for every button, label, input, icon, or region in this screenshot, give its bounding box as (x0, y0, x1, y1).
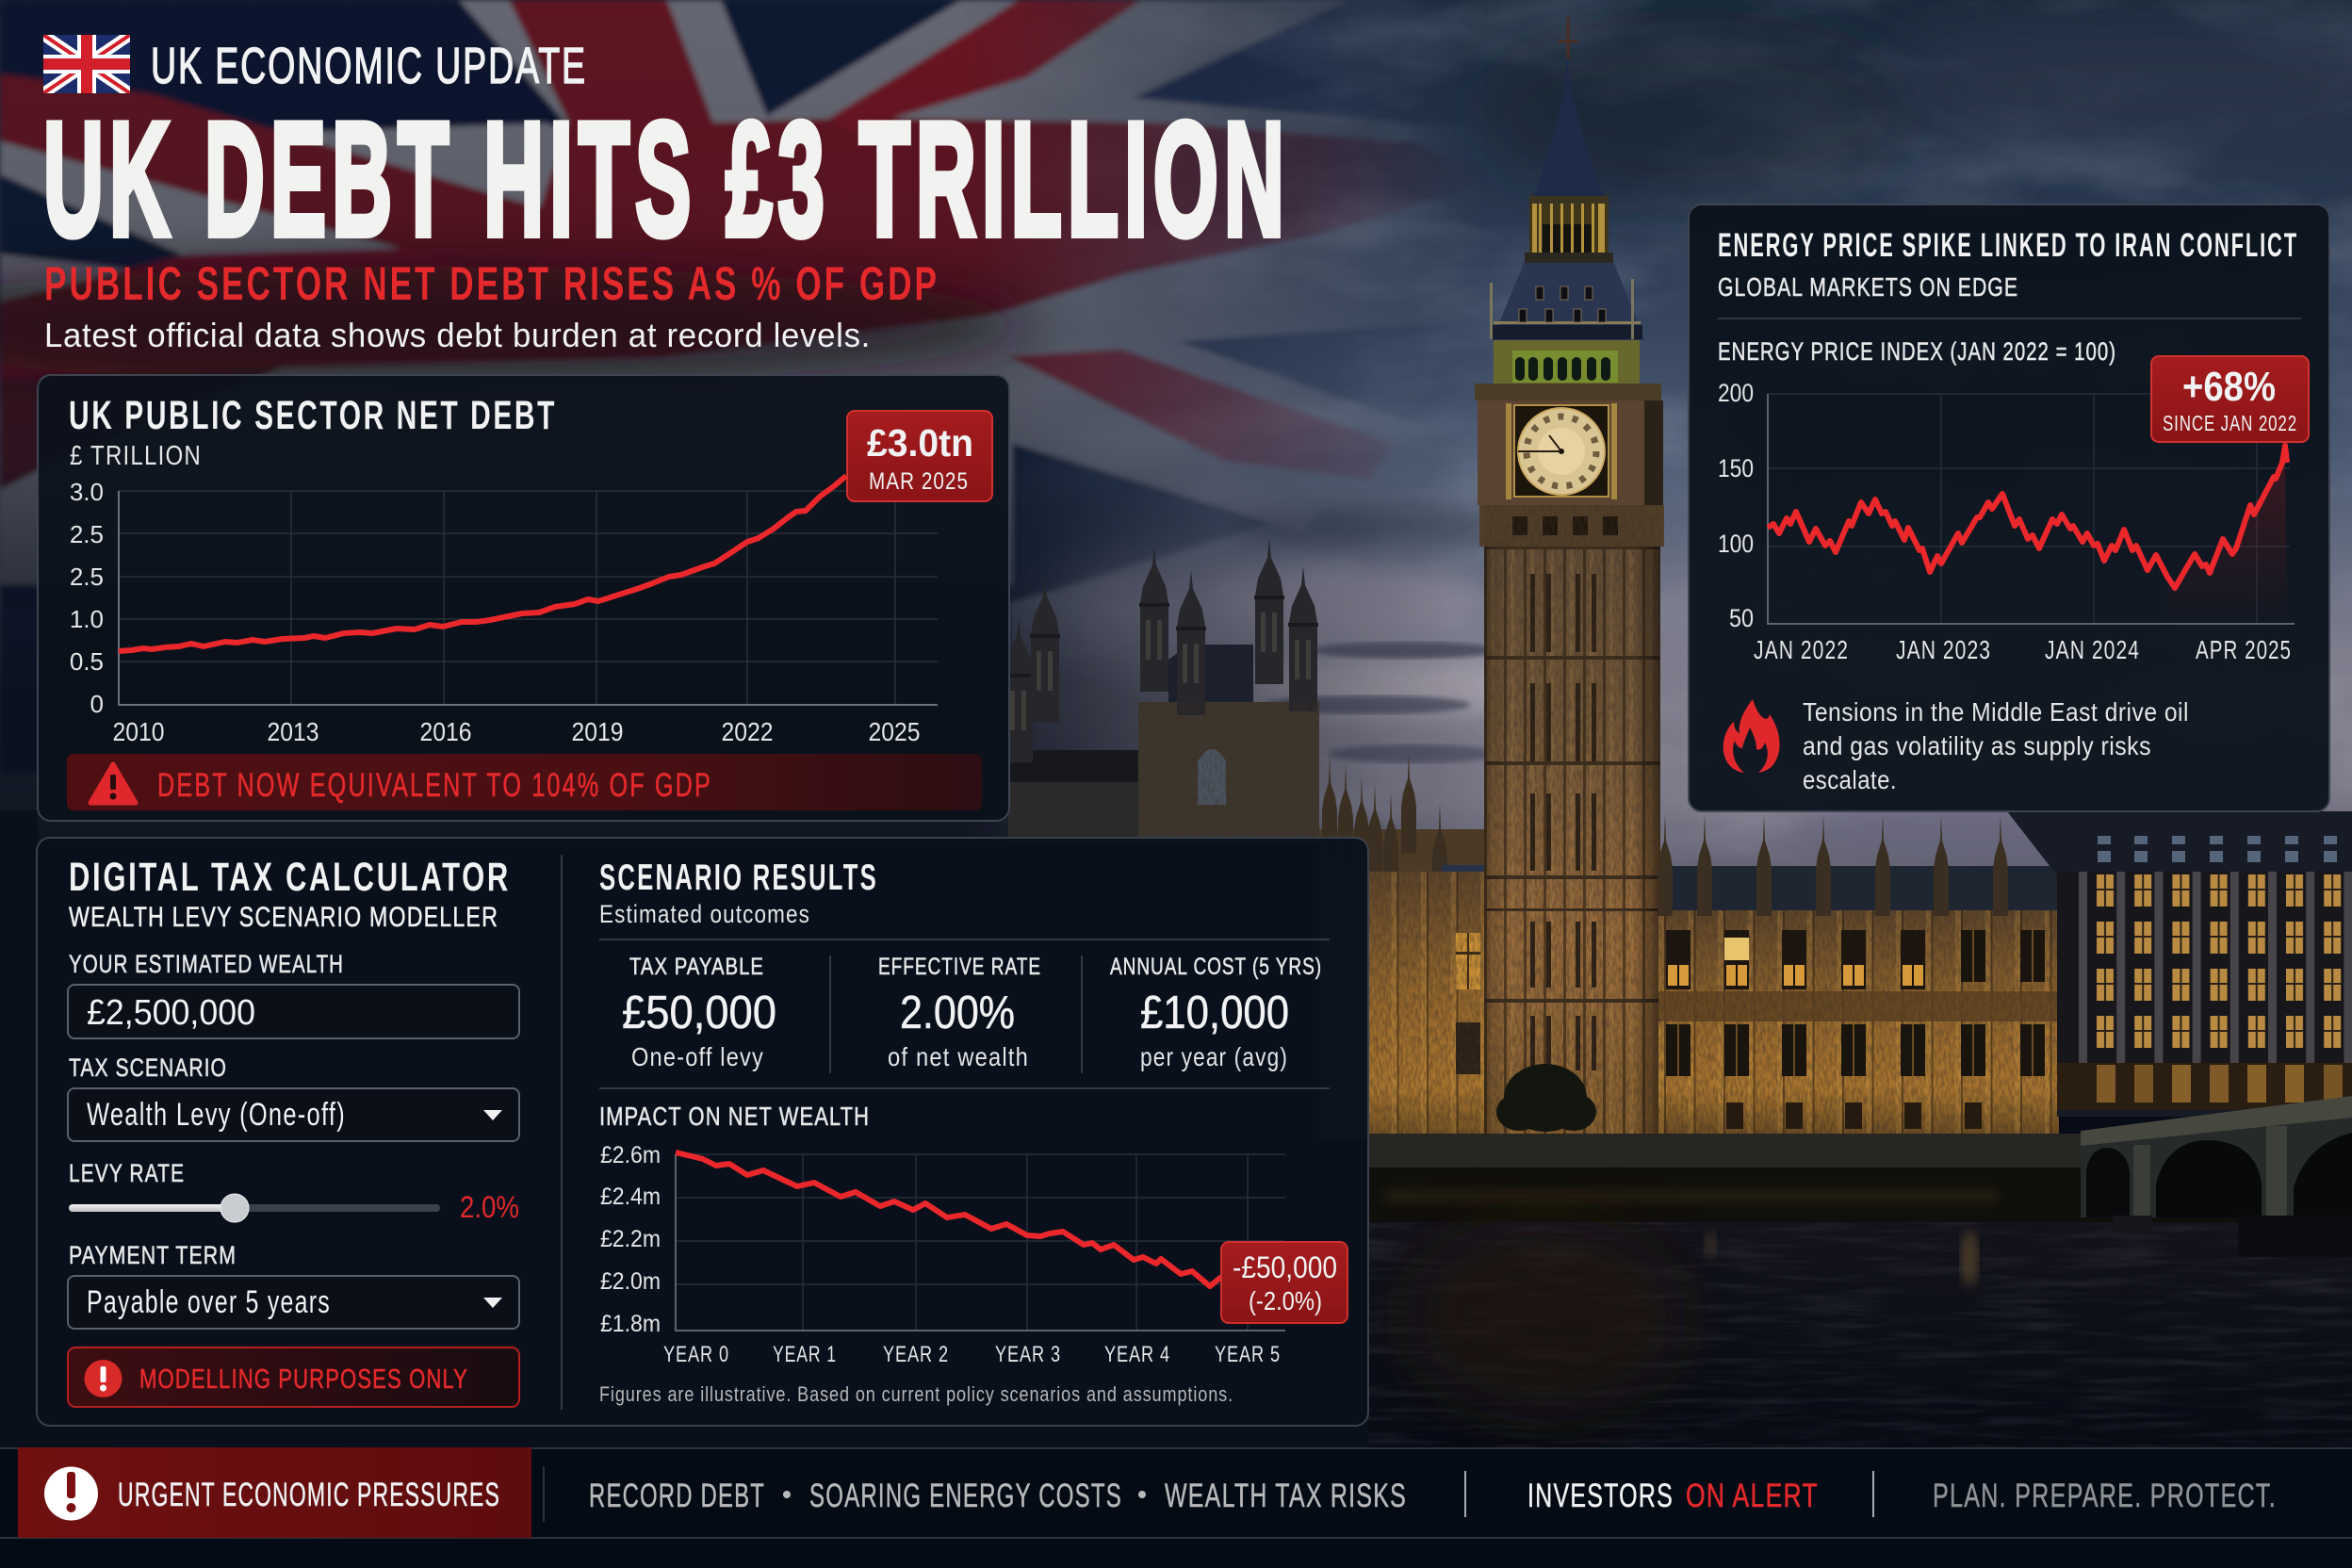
Palace of Westminster riverfront (1658, 814, 2064, 1134)
y axis labels (1718, 379, 1754, 632)
unit label: £ TRILLION (70, 441, 202, 471)
y axis labels: 0.5 (70, 647, 104, 676)
stat: effective rate: 2.00% (900, 988, 1015, 1038)
y axis labels: 0 (90, 690, 104, 718)
notice: modelling purposes only: MODELLING PURPOSES ONLY (139, 1364, 468, 1395)
x axis labels (663, 1342, 1281, 1367)
y axis labels: £1.8m (600, 1311, 661, 1337)
calculator form column (68, 855, 519, 1407)
chart title: ENERGY PRICE INDEX (JAN 2022 = 100) (1718, 337, 2116, 366)
stat: annual cost: per year (avg) (1140, 1042, 1288, 1071)
stat: annual cost (1110, 954, 1322, 1071)
y axis labels: 2.5 (70, 520, 104, 548)
tree silhouette (1496, 1064, 1596, 1132)
y axis labels: £2.4m (600, 1184, 661, 1210)
callout: £3.0tn: £3.0tn (867, 421, 973, 465)
urgent block: URGENT ECONOMIC PRESSURES (118, 1477, 500, 1513)
heading: UK PUBLIC SECTOR NET DEBT (69, 393, 557, 438)
icon: flame (1723, 699, 1780, 773)
x axis labels: JAN 2022 (1754, 635, 1849, 664)
panel: digital tax calculator (37, 838, 1368, 1426)
alert bar: 104% of GDP: DEBT NOW EQUIVALENT TO 104% OF GDP (157, 767, 712, 804)
line chart: debt (70, 476, 938, 746)
x axis labels (113, 717, 920, 746)
energy line (1768, 446, 2287, 588)
icon: Union Jack (43, 35, 130, 93)
description text (1803, 697, 2189, 794)
icon: warning triangle (90, 764, 136, 803)
y axis labels: 3.0 (70, 478, 104, 506)
area under line (2167, 446, 2287, 624)
tower shaft (1484, 505, 1660, 1135)
slider: levy rate (69, 1190, 519, 1224)
belfry band (1479, 505, 1664, 547)
clock stage (1478, 400, 1663, 505)
spire cross (1559, 17, 1577, 58)
embankment (1368, 1134, 2352, 1224)
x axis labels (1754, 635, 2292, 664)
y axis labels: £2.0m (600, 1268, 661, 1295)
callout: -£50,000 (1221, 1242, 1348, 1323)
x axis labels: 2013 (268, 717, 318, 746)
payment term label: PAYMENT TERM (69, 1241, 237, 1269)
panel: UK public sector net debt (38, 375, 1009, 821)
input: wealth: £2,500,000 (87, 993, 255, 1033)
panel: energy price spike (1689, 204, 2329, 811)
spire (1530, 58, 1608, 196)
callout: -£50,000: (-2.0%) (1249, 1286, 1322, 1315)
select: scenario: Wealth Levy (One-off) (87, 1097, 346, 1133)
stone texture on buildings (1131, 499, 2073, 1140)
y axis labels: 100 (1718, 530, 1754, 558)
y axis labels (70, 478, 104, 718)
scenario label: TAX SCENARIO (69, 1054, 227, 1082)
slider: levy rate: 2.0% (460, 1190, 519, 1224)
y axis labels: 200 (1718, 379, 1754, 407)
flag darkening (0, 0, 1460, 843)
y axis labels: 1.0 (70, 605, 104, 633)
kicker text: UK ECONOMIC UPDATE (151, 38, 587, 94)
description text: escalate. (1803, 765, 1897, 794)
stat: annual cost: £10,000 (1140, 988, 1289, 1038)
lantern (1529, 202, 1609, 256)
calculator subheading: WEALTH LEVY SCENARIO MODELLER (69, 902, 498, 933)
sky (0, 0, 2352, 942)
x axis labels: YEAR 5 (1215, 1342, 1281, 1367)
icon: exclamation (44, 1466, 98, 1521)
stat: tax payable: One-off levy (631, 1042, 764, 1071)
debt line (119, 476, 846, 651)
pressures list: WEALTH TAX RISKS (1165, 1478, 1407, 1514)
x axis labels: 2010 (113, 717, 164, 746)
storm clouds (942, 0, 2352, 923)
Portcullis House (2007, 811, 2352, 1117)
x axis labels: YEAR 0 (663, 1342, 729, 1367)
x axis labels: 2019 (571, 717, 624, 746)
stat: effective rate: of net wealth (888, 1042, 1029, 1071)
description text: and gas volatility as supply risks (1803, 731, 2151, 760)
levy rate label: LEVY RATE (69, 1159, 185, 1187)
stat: tax payable: TAX PAYABLE (629, 954, 764, 980)
pressures list (589, 1478, 1407, 1514)
x axis labels: YEAR 2 (883, 1342, 949, 1367)
calculator heading: DIGITAL TAX CALCULATOR (69, 855, 511, 900)
callout: +68%: +68% (2182, 364, 2276, 410)
bottom banner (0, 1447, 2352, 1568)
subheading: GLOBAL MARKETS ON EDGE (1718, 272, 2018, 302)
River Thames (1368, 1216, 2352, 1448)
wealth field label: YOUR ESTIMATED WEALTH (69, 950, 344, 978)
line chart: energy price index (1718, 379, 2295, 664)
intro text: Latest official data shows debt burden at record levels. (44, 316, 871, 354)
callout: -£50,000: -£50,000 (1233, 1250, 1337, 1284)
Victoria Tower wing (1004, 539, 1319, 844)
y axis labels (600, 1142, 661, 1337)
clock face (1518, 408, 1605, 495)
select: scenario (68, 1088, 519, 1141)
Parliament wing between towers (1319, 752, 1489, 1140)
Westminster Bridge (2081, 1096, 2352, 1257)
stat: tax payable (622, 954, 776, 1071)
callout: +68% (2151, 356, 2309, 442)
investors on alert: ON ALERT (1686, 1478, 1819, 1514)
results heading: SCENARIO RESULTS (599, 858, 878, 898)
dark base left of the river (0, 810, 1368, 1451)
clock frame (1514, 405, 1609, 497)
x axis labels: JAN 2024 (2045, 635, 2140, 664)
y axis labels: 150 (1718, 454, 1754, 482)
results subheading: Estimated outcomes (599, 900, 810, 928)
urgent block (18, 1447, 531, 1538)
stat: effective rate: EFFECTIVE RATE (878, 954, 1041, 980)
stat: annual cost: ANNUAL COST (5 YRS) (1110, 954, 1322, 980)
y axis labels: £2.6m (600, 1142, 661, 1168)
shade behind subtitle (0, 267, 1037, 384)
line chart: impact on net wealth (600, 1142, 1285, 1367)
pale clouds above the palace (1065, 571, 1442, 635)
y axis labels: 50 (1729, 604, 1754, 632)
x axis labels: 2016 (420, 717, 471, 746)
header: section label with flag (43, 35, 587, 94)
select: payment term: Payable over 5 years (87, 1284, 331, 1320)
scenario results column (599, 858, 1348, 1406)
description text: Tensions in the Middle East drive oil (1803, 697, 2189, 727)
callout: £3.0tn: MAR 2025 (869, 468, 969, 495)
alert bar: 104% of GDP (67, 754, 982, 810)
x axis labels: YEAR 4 (1104, 1342, 1170, 1367)
investors on alert: INVESTORS (1527, 1478, 1674, 1514)
Union flag backdrop (0, 0, 1460, 843)
wealth line (676, 1152, 1221, 1286)
select: payment term (68, 1276, 519, 1329)
y axis labels: 2.5 (70, 563, 104, 591)
footnote: Figures are illustrative. Based on current policy scenarios and assumptions. (599, 1382, 1233, 1406)
chart heading: IMPACT ON NET WEALTH (599, 1102, 870, 1131)
stat: tax payable: £50,000 (622, 988, 776, 1038)
stat: effective rate (878, 954, 1041, 1071)
callout: +68%: SINCE JAN 2022 (2163, 411, 2297, 435)
x axis labels: APR 2025 (2196, 635, 2292, 664)
x axis labels: 2025 (869, 717, 920, 746)
Elizabeth Tower (Big Ben) (1475, 17, 1664, 1135)
x axis labels: YEAR 1 (773, 1342, 837, 1367)
lower roof (1492, 261, 1644, 340)
pressures list: RECORD DEBT (589, 1478, 765, 1514)
subtitle: PUBLIC SECTOR NET DEBT RISES AS % OF GDP (44, 257, 939, 310)
pressures list: SOARING ENERGY COSTS (809, 1478, 1122, 1514)
x axis labels: 2022 (722, 717, 773, 746)
notice: modelling purposes only (68, 1348, 519, 1407)
y axis labels: £2.2m (600, 1226, 661, 1252)
callout: £3.0tn (847, 411, 992, 501)
input: wealth (68, 985, 519, 1038)
x axis labels: JAN 2023 (1896, 635, 1991, 664)
palace windows (1666, 930, 2045, 1129)
x axis labels: YEAR 3 (995, 1342, 1061, 1367)
green belfry (1494, 340, 1640, 384)
